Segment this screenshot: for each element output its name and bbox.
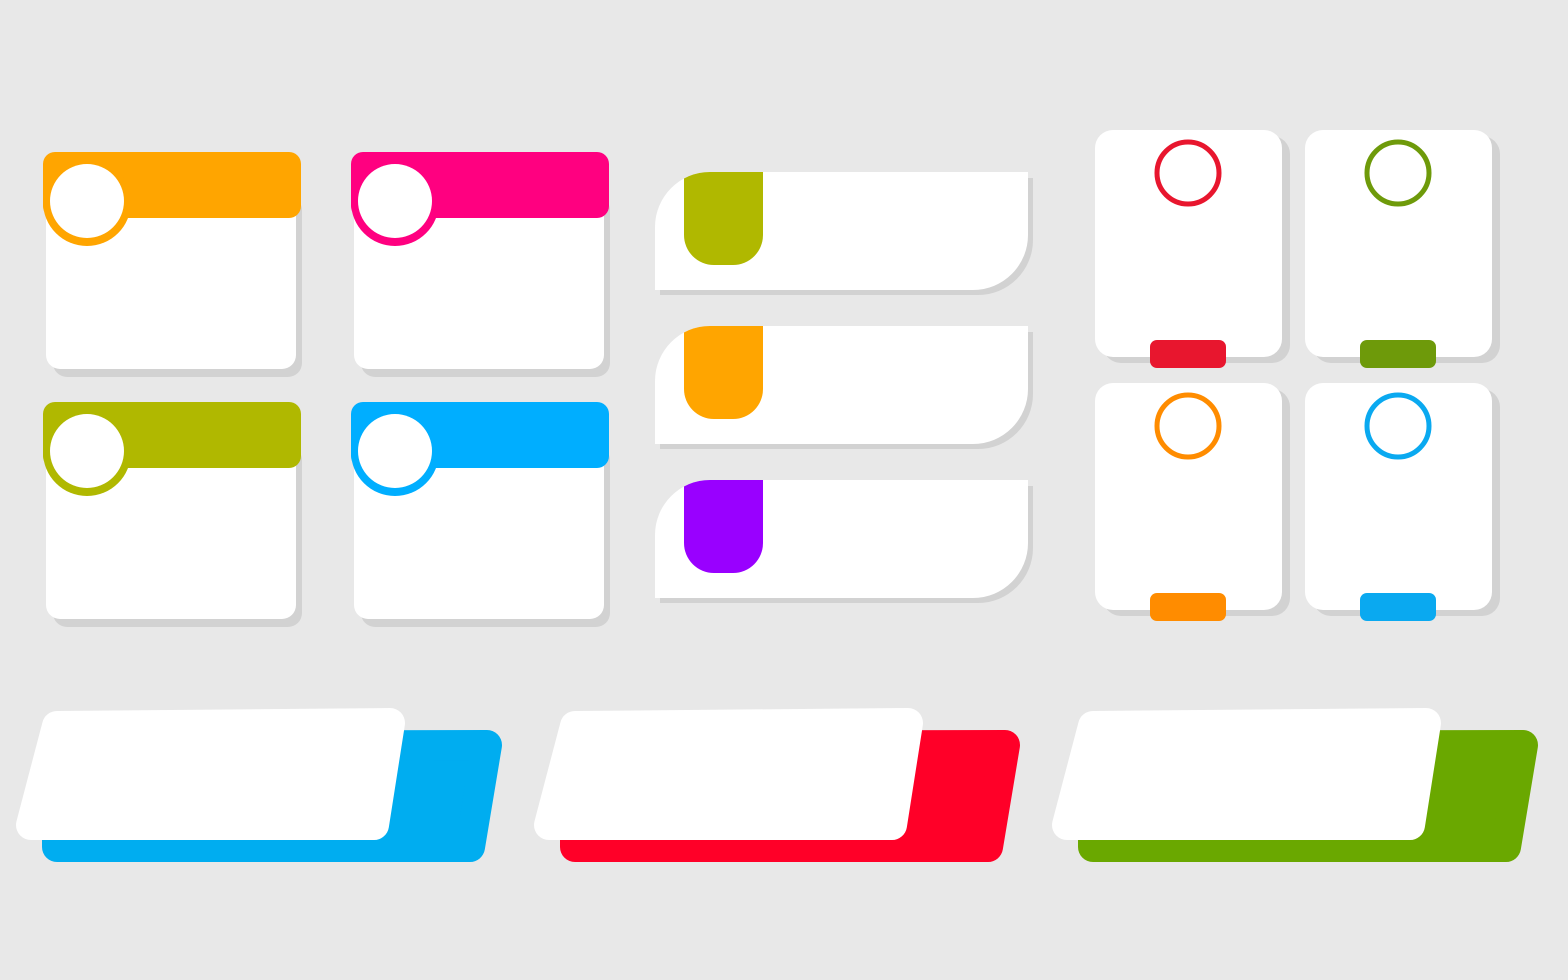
panel: slanted banner blue [31,723,487,847]
panel: card olive [43,402,302,627]
panel: small card orange [1095,383,1290,621]
panel: small card green [1305,130,1500,368]
panel: card pink [351,152,610,377]
panel: small card blue [1305,383,1500,621]
panel: slanted banner green [1067,723,1523,847]
panel: card orange [43,152,302,377]
panel: banner orange [655,326,1033,449]
panel: banner purple [655,480,1033,603]
panel: banner olive [655,172,1033,295]
panel: card blue [351,402,610,627]
panel: small card red [1095,130,1290,368]
panel: slanted banner red [549,723,1005,847]
